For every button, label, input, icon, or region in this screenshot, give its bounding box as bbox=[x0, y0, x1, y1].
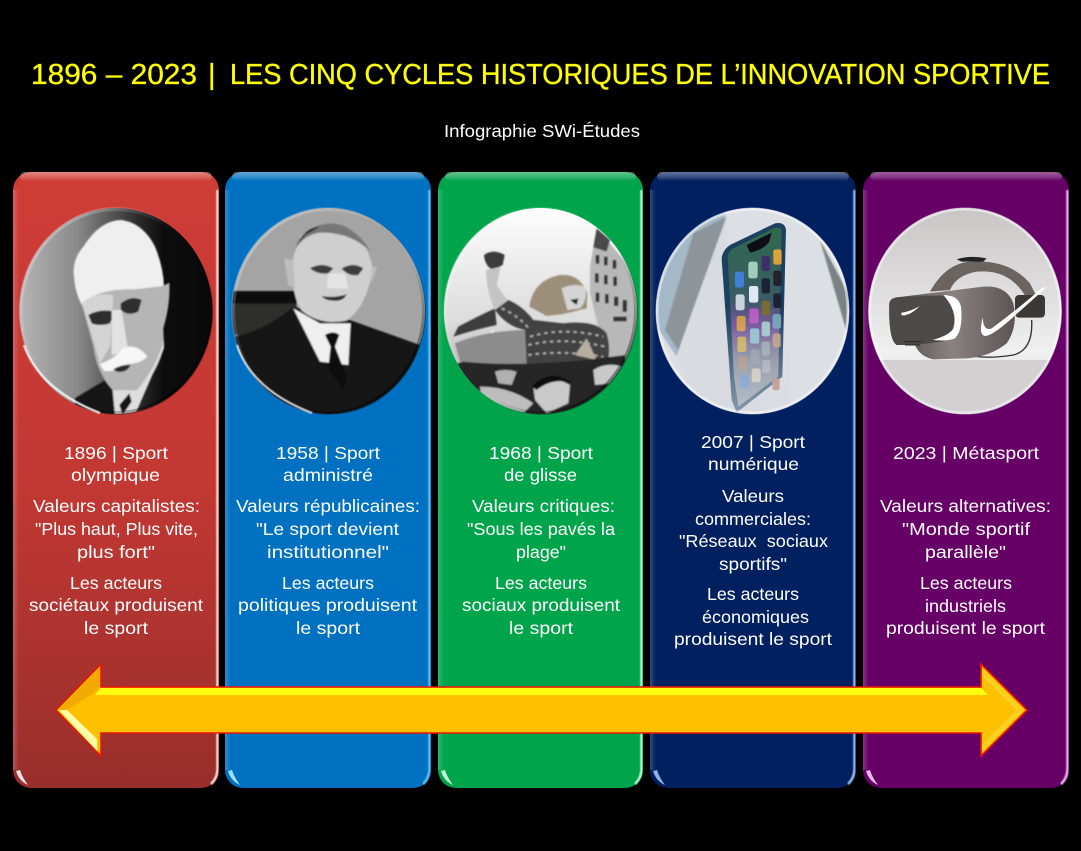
text: 2023: "Monde sportif bbox=[902, 519, 1030, 539]
text: 1896: 1896 | Sport bbox=[64, 443, 168, 463]
text: 1958: institutionnel" bbox=[267, 542, 389, 562]
panel: 2023 métasport bbox=[863, 172, 1069, 788]
text: 1896: olympique bbox=[71, 465, 160, 485]
text: 1958: administré bbox=[283, 465, 373, 485]
panel: 1968 sport de glisse bbox=[438, 172, 643, 788]
text: 2007: 2007 | Sport bbox=[701, 432, 805, 452]
text: 1968: Les acteurs bbox=[495, 573, 587, 593]
text: 2007: numérique bbox=[708, 454, 799, 474]
text: 1968: plage" bbox=[516, 542, 566, 562]
text: 1958: "Le sport devient bbox=[256, 519, 399, 539]
text: 2007: sportifs" bbox=[719, 554, 787, 574]
text: 2023: 2023 | Métasport bbox=[893, 443, 1039, 463]
text: 1968: Valeurs critiques: bbox=[472, 496, 615, 516]
text: 2007: Valeurs bbox=[722, 486, 784, 506]
text: 2007: produisent le sport bbox=[674, 629, 832, 649]
text: 1968: "Sous les pavés la bbox=[467, 519, 615, 539]
text: 1968: sociaux produisent bbox=[462, 595, 620, 615]
text: 1958 bbox=[236, 443, 420, 638]
text: 1896: le sport bbox=[84, 618, 148, 638]
title: LES CINQ CYCLES HISTORIQUES DE L’INNOVATION SPORTIVE bbox=[230, 59, 1050, 91]
text: 2007 bbox=[674, 432, 832, 649]
photo: smartphone bbox=[656, 207, 850, 417]
text: 2023 bbox=[880, 443, 1051, 638]
text: 1968 bbox=[462, 443, 620, 638]
text: 1968: 1968 | Sport bbox=[489, 443, 593, 463]
title: | bbox=[208, 59, 216, 91]
text: 1896: plus fort" bbox=[77, 542, 155, 562]
text: 2023: industriels bbox=[925, 596, 1006, 616]
text: 2007: économiques bbox=[702, 607, 809, 627]
text: 1896: Les acteurs bbox=[70, 573, 162, 593]
text: 1958: Les acteurs bbox=[282, 573, 374, 593]
text: 1968: de glisse bbox=[504, 465, 577, 485]
text: 2007: Les acteurs bbox=[707, 584, 799, 604]
text: 1896: sociétaux produisent bbox=[29, 595, 203, 615]
photo: Pierre de Coubertin bbox=[19, 208, 213, 415]
panel: 2007 sport numérique bbox=[650, 172, 856, 788]
text: 2023: parallèle" bbox=[925, 542, 1006, 562]
text: 1958: 1958 | Sport bbox=[276, 443, 380, 463]
text: 1896: "Plus haut, Plus vite, bbox=[35, 519, 198, 539]
text: 1958: Valeurs républicaines: bbox=[236, 496, 420, 516]
subtitle: Infographie SWi-Études bbox=[444, 121, 640, 141]
text: 2023: Valeurs alternatives: bbox=[880, 496, 1051, 516]
photo: mai 1968 bbox=[444, 208, 638, 420]
photo: Charles de Gaulle bbox=[231, 208, 426, 417]
panel: 1958 sport administré bbox=[225, 172, 431, 788]
text: 1896 bbox=[29, 443, 203, 638]
text: 2023: produisent le sport bbox=[886, 618, 1045, 638]
text: 1896: Valeurs capitalistes: bbox=[33, 496, 200, 516]
text: 1968: le sport bbox=[509, 618, 573, 638]
text: 2007: "Réseaux sociaux bbox=[679, 531, 828, 551]
text: 1958: le sport bbox=[296, 618, 360, 638]
text: 2007: commerciales: bbox=[695, 509, 811, 529]
arrow: double timeline arrow bbox=[56, 664, 1027, 756]
panel: 1896 sport olympique bbox=[13, 172, 219, 788]
title: 1896 – 2023 bbox=[31, 59, 197, 91]
text: 1958: politiques produisent bbox=[238, 595, 417, 615]
photo: VR headset bbox=[867, 208, 1067, 417]
text: 2023: Les acteurs bbox=[920, 573, 1012, 593]
